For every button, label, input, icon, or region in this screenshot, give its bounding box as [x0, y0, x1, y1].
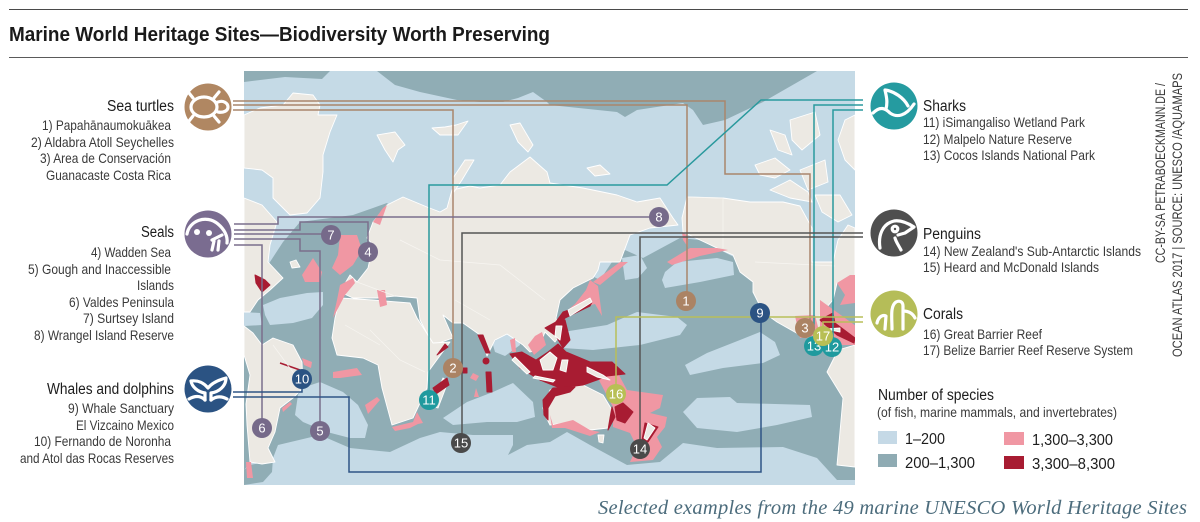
numbered site markers: 7: [327, 228, 335, 242]
numbered site markers: 11: [422, 392, 436, 408]
panel: whales and dolphins: and Atol das Rocas Reserves: [20, 450, 174, 466]
panel: sea turtles: Sea turtles: [107, 98, 174, 115]
extensions of connector lines past the map edge: [233, 100, 863, 397]
panel: seals: Islands: [137, 277, 174, 293]
icon: seal: [184, 210, 232, 258]
legend: Number of species: [878, 387, 994, 404]
credits: CC-BY-SA PETRABOECKMANN.DE /: [1152, 83, 1168, 263]
numbered site markers: [252, 207, 842, 459]
panel: seals: 8) Wrangel Island Reserve: [34, 327, 174, 343]
legend: 1,300–3,300: [1032, 432, 1113, 449]
panel: sharks: 12) Malpelo Nature Reserve: [923, 131, 1072, 147]
panel: sea turtles: [31, 98, 174, 183]
credits: [1152, 73, 1185, 357]
panel: seals: 6) Valdes Peninsula: [69, 294, 174, 310]
panel: sea turtles: 3) Area de Conservación: [40, 150, 171, 166]
numbered site markers: 13: [807, 338, 821, 354]
legend: (of fish, marine mammals, and invertebrates): [877, 404, 1117, 420]
panel: sea turtles: Guanacaste Costa Rica: [46, 167, 171, 183]
islands over reefs: [512, 298, 840, 440]
coral connector lines: [615, 316, 855, 384]
legend: [877, 387, 1117, 473]
icon: coral: [870, 290, 918, 338]
panel: whales and dolphins: El Vizcaino Mexico: [76, 417, 174, 433]
numbered site markers: 12: [825, 340, 839, 354]
panel: sharks: Sharks: [923, 98, 966, 115]
footer caption: Selected examples from the 49 marine UNESCO World Heritage Sites: [598, 497, 1187, 519]
numbered site markers: 17: [816, 328, 830, 344]
panel: whales and dolphins: Whales and dolphins: [47, 381, 174, 398]
panel: sea turtles: 2) Aldabra Atoll Seychelles: [31, 134, 174, 150]
numbered site markers: 9: [756, 306, 764, 320]
panel: penguins: 15) Heard and McDonald Islands: [923, 259, 1099, 275]
title: Marine World Heritage Sites—Biodiversity Worth Preserving: [9, 24, 550, 46]
panel: whales and dolphins: 10) Fernando de Noronha: [34, 433, 171, 449]
species richness 1,300–3,300: [246, 205, 856, 478]
panel: penguins: [923, 226, 1141, 275]
numbered site markers: 16: [609, 386, 623, 402]
panel: corals: Corals: [923, 306, 963, 323]
panel: corals: 16) Great Barrier Reef: [923, 326, 1042, 342]
penguin connector lines: [462, 233, 865, 449]
panel: sharks: [923, 98, 1096, 163]
numbered site markers: 2: [449, 360, 457, 376]
numbered site markers: 4: [364, 244, 372, 260]
panel: seals: 4) Wadden Sea: [91, 244, 171, 260]
panel: seals: 7) Surtsey Island: [83, 310, 174, 326]
panel: whales and dolphins: [20, 381, 174, 466]
panel: sea turtles: 1) Papahānaumokuākea: [42, 117, 171, 133]
numbered site markers: 8: [655, 210, 663, 224]
panel: whales and dolphins: 9) Whale Sanctuary: [68, 400, 174, 416]
legend: 3,300–8,300: [1032, 456, 1115, 473]
panel: sharks: 11) iSimangaliso Wetland Park: [923, 114, 1086, 130]
panel: seals: 5) Gough and Inaccessible: [28, 261, 171, 277]
legend: 1–200: [905, 431, 945, 448]
panel: sharks: 13) Cocos Islands National Park: [923, 147, 1096, 163]
borders: [273, 197, 835, 375]
shark connector lines: [429, 100, 865, 400]
numbered site markers: 14: [633, 442, 647, 456]
credits: OCEAN ATLAS 2017 | SOURCE: UNESCO /AQUAMAPS: [1169, 73, 1185, 357]
panel: corals: [923, 306, 1133, 358]
icon: sea turtle: [184, 84, 232, 130]
numbered site markers: 5: [316, 424, 324, 438]
legend: 200–1,300: [905, 455, 975, 472]
numbered site markers: 10: [295, 372, 309, 386]
panel: seals: [28, 224, 174, 343]
panel: penguins: 14) New Zealand's Sub-Antarctic Islands: [923, 243, 1141, 259]
numbered site markers: 15: [454, 436, 468, 450]
icon: whale tail: [184, 366, 232, 412]
land masses: [244, 93, 855, 467]
seal connector lines: [234, 217, 659, 431]
icon: shark: [870, 82, 918, 130]
numbered site markers: 3: [801, 320, 809, 336]
species richness 3,300–8,300: [255, 275, 855, 442]
arctic high-diversity bands: [244, 71, 855, 485]
turtle connector lines: [233, 101, 810, 368]
map: [233, 71, 865, 485]
panel: seals: Seals: [141, 224, 174, 241]
canadian arctic islands: [790, 112, 820, 150]
icon: penguin: [870, 210, 918, 256]
ocean gyres, lower diversity: [244, 256, 812, 470]
whale connector lines: [233, 313, 761, 472]
panel: penguins: Penguins: [923, 226, 981, 243]
panel: corals: 17) Belize Barrier Reef Reserve System: [923, 342, 1133, 358]
numbered site markers: 6: [258, 420, 266, 436]
numbered site markers: 1: [682, 294, 690, 308]
greenland: [244, 93, 337, 215]
